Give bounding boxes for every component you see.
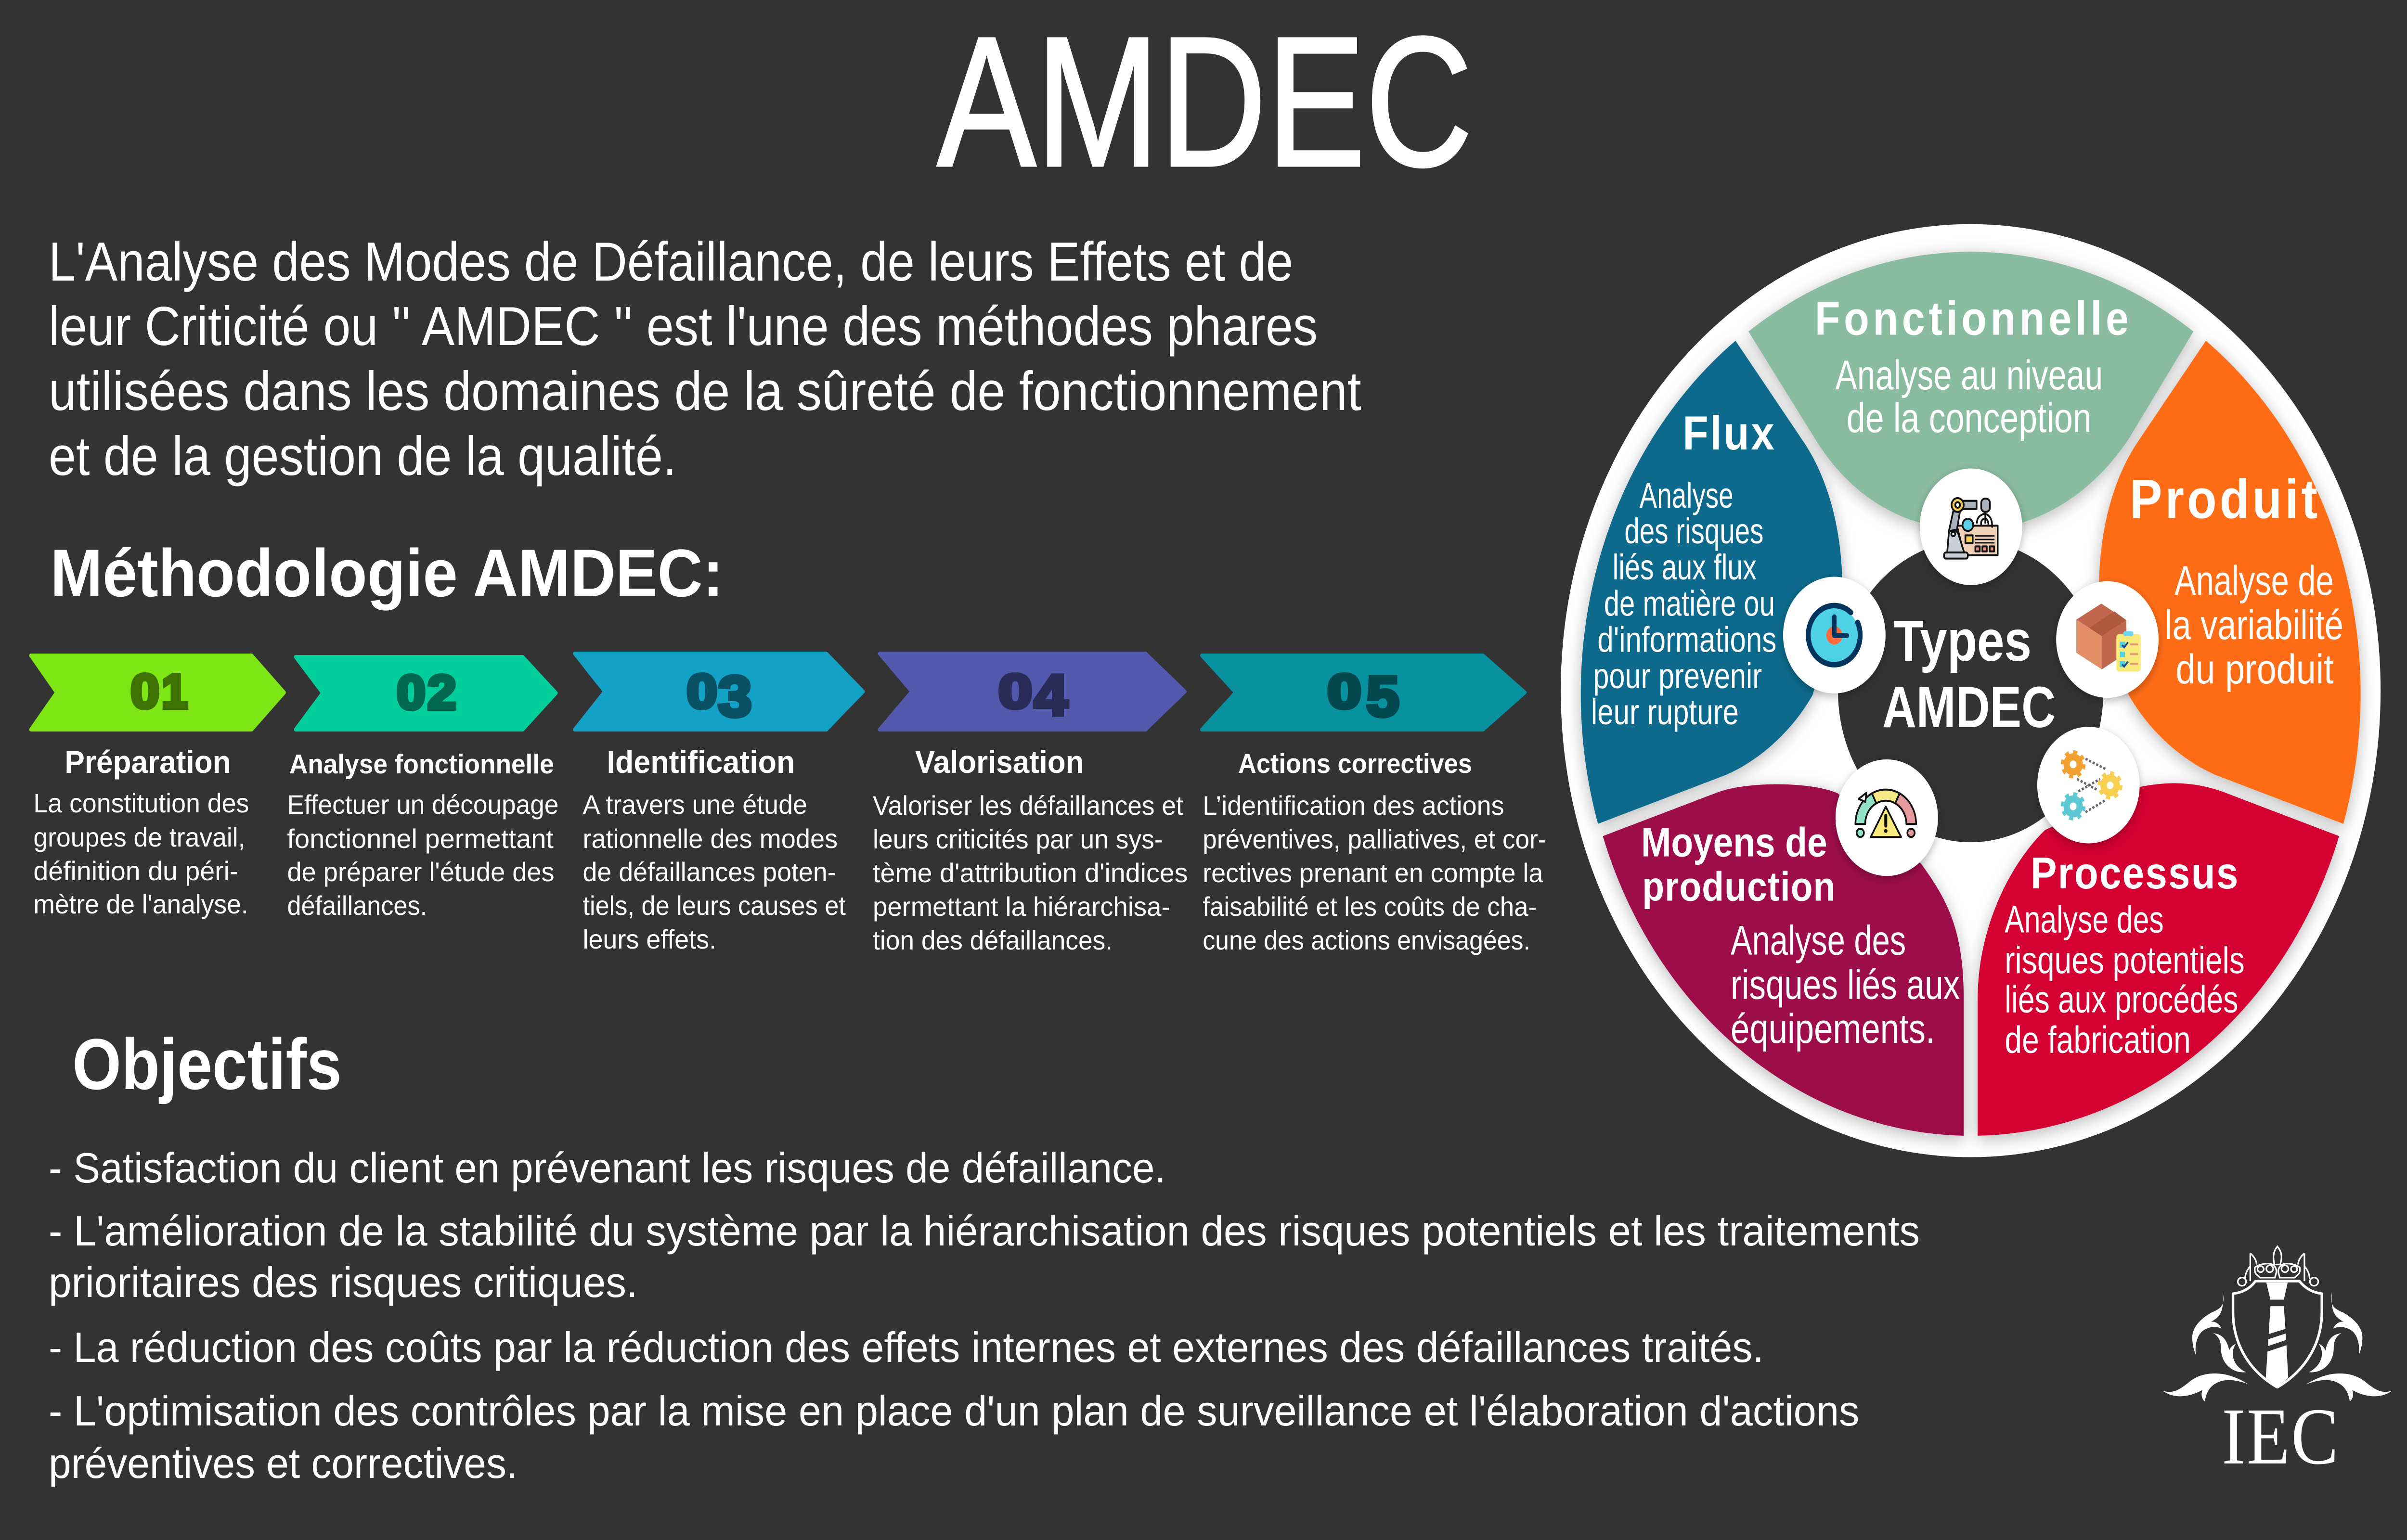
description: Effectuer un découpage <box>287 790 558 820</box>
step 5: corrective actions <box>1202 655 1546 956</box>
objectives list: préventives et correctives. <box>49 1439 518 1487</box>
labels: Moyens de production: équipements. <box>1731 1006 1935 1052</box>
description: de préparer l'étude des <box>287 857 555 887</box>
number 02: 0 <box>397 666 426 719</box>
description: L’identification des actions <box>1203 791 1504 821</box>
labels: Moyens de production: production <box>1642 864 1835 910</box>
labels: Flux: Analyse <box>1640 475 1734 515</box>
labels: Produit: Analyse de <box>2174 558 2334 604</box>
segment: Processus <box>1978 783 2339 1136</box>
wheel: types of AMDEC <box>1561 224 2381 1157</box>
number 02: 2 <box>427 666 456 719</box>
center label <box>1882 609 2056 740</box>
heading: Préparation <box>65 745 231 780</box>
objectives list: - Satisfaction du client en prévenant les risques de défaillance. <box>49 1144 1166 1192</box>
description <box>582 790 846 955</box>
labels: Flux: liés aux flux <box>1613 547 1757 587</box>
labels: Processus <box>2005 848 2245 1061</box>
description: fonctionnel permettant <box>287 824 554 854</box>
description: permettant la hiérarchisa- <box>873 892 1170 922</box>
labels: Produit: la variabilité <box>2165 602 2343 648</box>
icon: clock <box>1783 577 1886 693</box>
labels: Flux: Flux <box>1682 406 1774 460</box>
chevron 04 <box>880 654 1185 730</box>
number 04: 4 <box>1034 663 1068 728</box>
objectives list: - L'amélioration de la stabilité du système par la hiérarchisation des risques potentiels et les traitements <box>49 1207 1920 1255</box>
center label: Types <box>1894 609 2032 674</box>
description <box>1203 791 1546 956</box>
description: rectives prenant en compte la <box>1203 858 1543 888</box>
chevron 01 <box>31 655 284 730</box>
heading: Valorisation <box>915 745 1084 780</box>
icon: gears process <box>2037 727 2140 843</box>
number 02 <box>397 666 456 719</box>
step 4: valuation <box>873 654 1188 956</box>
labels: Flux <box>1591 406 1776 732</box>
number 03: 0 <box>687 665 717 718</box>
labels: Processus: liés aux procédés <box>2005 978 2238 1020</box>
segment: Flux <box>1581 341 1842 824</box>
heading: Analyse fonctionnelle <box>289 749 554 780</box>
description: La constitution des <box>33 788 249 819</box>
description: tion des défaillances. <box>873 925 1113 956</box>
heading: methodology: Méthodologie AMDEC: <box>51 536 724 611</box>
icon: robot arm <box>1920 469 2022 585</box>
labels: Fonctionnelle: Analyse au niveau <box>1835 352 2103 398</box>
chevron 03 <box>575 654 863 730</box>
labels: Flux: d'informations <box>1597 620 1776 660</box>
objectives list <box>49 1144 1920 1487</box>
number 01: 0 <box>130 665 159 718</box>
heading: Actions correctives <box>1238 748 1472 779</box>
segment: Moyens de production <box>1603 784 1964 1136</box>
number 03: 3 <box>718 664 752 728</box>
description: préventives, palliatives, et cor- <box>1203 824 1546 855</box>
description <box>287 790 558 921</box>
step 2: functional analysis <box>287 657 558 921</box>
labels: Processus: Analyse des <box>2005 898 2164 941</box>
labels: Fonctionnelle: Fonctionnelle <box>1815 292 2129 345</box>
crest emblem <box>2163 1246 2392 1401</box>
intro paragraph <box>49 231 1361 487</box>
number 05: 0 <box>1327 665 1361 718</box>
description: A travers une étude <box>582 790 807 820</box>
labels: Processus: Processus <box>2031 848 2238 898</box>
labels: Produit <box>2130 468 2343 693</box>
intro paragraph: utilisées dans les domaines de la sûreté de fonctionnement <box>49 360 1361 422</box>
labels: Flux: leur rupture <box>1591 692 1739 732</box>
icon: risk gauge <box>1836 759 1938 876</box>
description: Valoriser les défaillances et <box>873 791 1183 821</box>
description: tiels, de leurs causes et <box>582 891 846 921</box>
segment: Fonctionnelle <box>1748 252 2193 523</box>
description: rationnelle des modes <box>582 824 838 854</box>
intro paragraph: et de la gestion de la qualité. <box>49 425 676 487</box>
labels: Moyens de production: risques liés aux <box>1731 962 1960 1008</box>
intro paragraph: L'Analyse des Modes de Défaillance, de leurs Effets et de <box>49 231 1293 292</box>
chevron 02 <box>296 657 556 730</box>
labels: Processus: de fabrication <box>2005 1018 2191 1061</box>
number 04 <box>998 663 1068 728</box>
segment: Produit <box>2099 341 2361 824</box>
number 03 <box>687 664 752 728</box>
icon: box and checklist <box>2056 581 2159 698</box>
labels: Produit: du produit <box>2175 646 2334 693</box>
labels: Moyens de production: Moyens de <box>1641 820 1827 866</box>
number 01: 1 <box>162 665 188 718</box>
description: tème d'attribution d'indices <box>873 858 1188 888</box>
step 3: identification <box>575 654 863 955</box>
description <box>33 788 249 920</box>
objectives list: - L'optimisation des contrôles par la mise en place d'un plan de surveillance et l'élaboration d'actions <box>49 1387 1859 1435</box>
labels: Flux: des risques <box>1624 511 1763 551</box>
step 1: preparation <box>31 655 284 920</box>
title: AMDEC <box>937 0 1473 205</box>
description: leurs criticités par un sys- <box>873 824 1163 855</box>
number 05: 5 <box>1366 665 1399 728</box>
heading: objectives: Objectifs <box>72 1024 342 1104</box>
description: faisabilité et les coûts de cha- <box>1203 892 1537 922</box>
objectives list: - La réduction des coûts par la réduction des effets internes et externes des défaillances traités. <box>49 1323 1764 1371</box>
center hub <box>1838 540 2103 842</box>
description <box>873 791 1188 956</box>
intro paragraph: leur Criticité ou '' AMDEC '' est l'une des méthodes phares <box>49 295 1318 357</box>
description: définition du péri- <box>33 856 238 886</box>
description: de défaillances poten- <box>582 857 836 887</box>
objectives list: prioritaires des risques critiques. <box>49 1258 638 1306</box>
number 05 <box>1327 665 1399 728</box>
description: groupes de travail, <box>33 822 245 853</box>
description: cune des actions envisagées. <box>1203 925 1530 956</box>
heading: Identification <box>607 745 795 780</box>
labels: Fonctionnelle: de la conception <box>1847 395 2092 441</box>
number 04: 0 <box>998 665 1032 718</box>
labels: Moyens de production: Analyse des <box>1731 917 1906 964</box>
center label: AMDEC <box>1882 675 2056 740</box>
number 01 <box>130 665 188 718</box>
labels: Flux: de matière ou <box>1604 584 1775 623</box>
labels: Fonctionnelle <box>1815 292 2129 441</box>
description: défaillances. <box>287 891 427 921</box>
labels: Processus: risques potentiels <box>2005 939 2245 981</box>
chevron 05 <box>1202 655 1525 730</box>
labels: Flux: pour prevenir <box>1593 656 1762 696</box>
description: leurs effets. <box>582 924 716 955</box>
description: mètre de l'analyse. <box>33 889 248 920</box>
wheel outer disk <box>1561 224 2381 1157</box>
logo: IEC crest <box>2163 1246 2392 1481</box>
labels: Produit: Produit <box>2130 468 2317 530</box>
labels: Moyens de production <box>1641 820 1960 1052</box>
logo text: IEC <box>2222 1392 2339 1481</box>
